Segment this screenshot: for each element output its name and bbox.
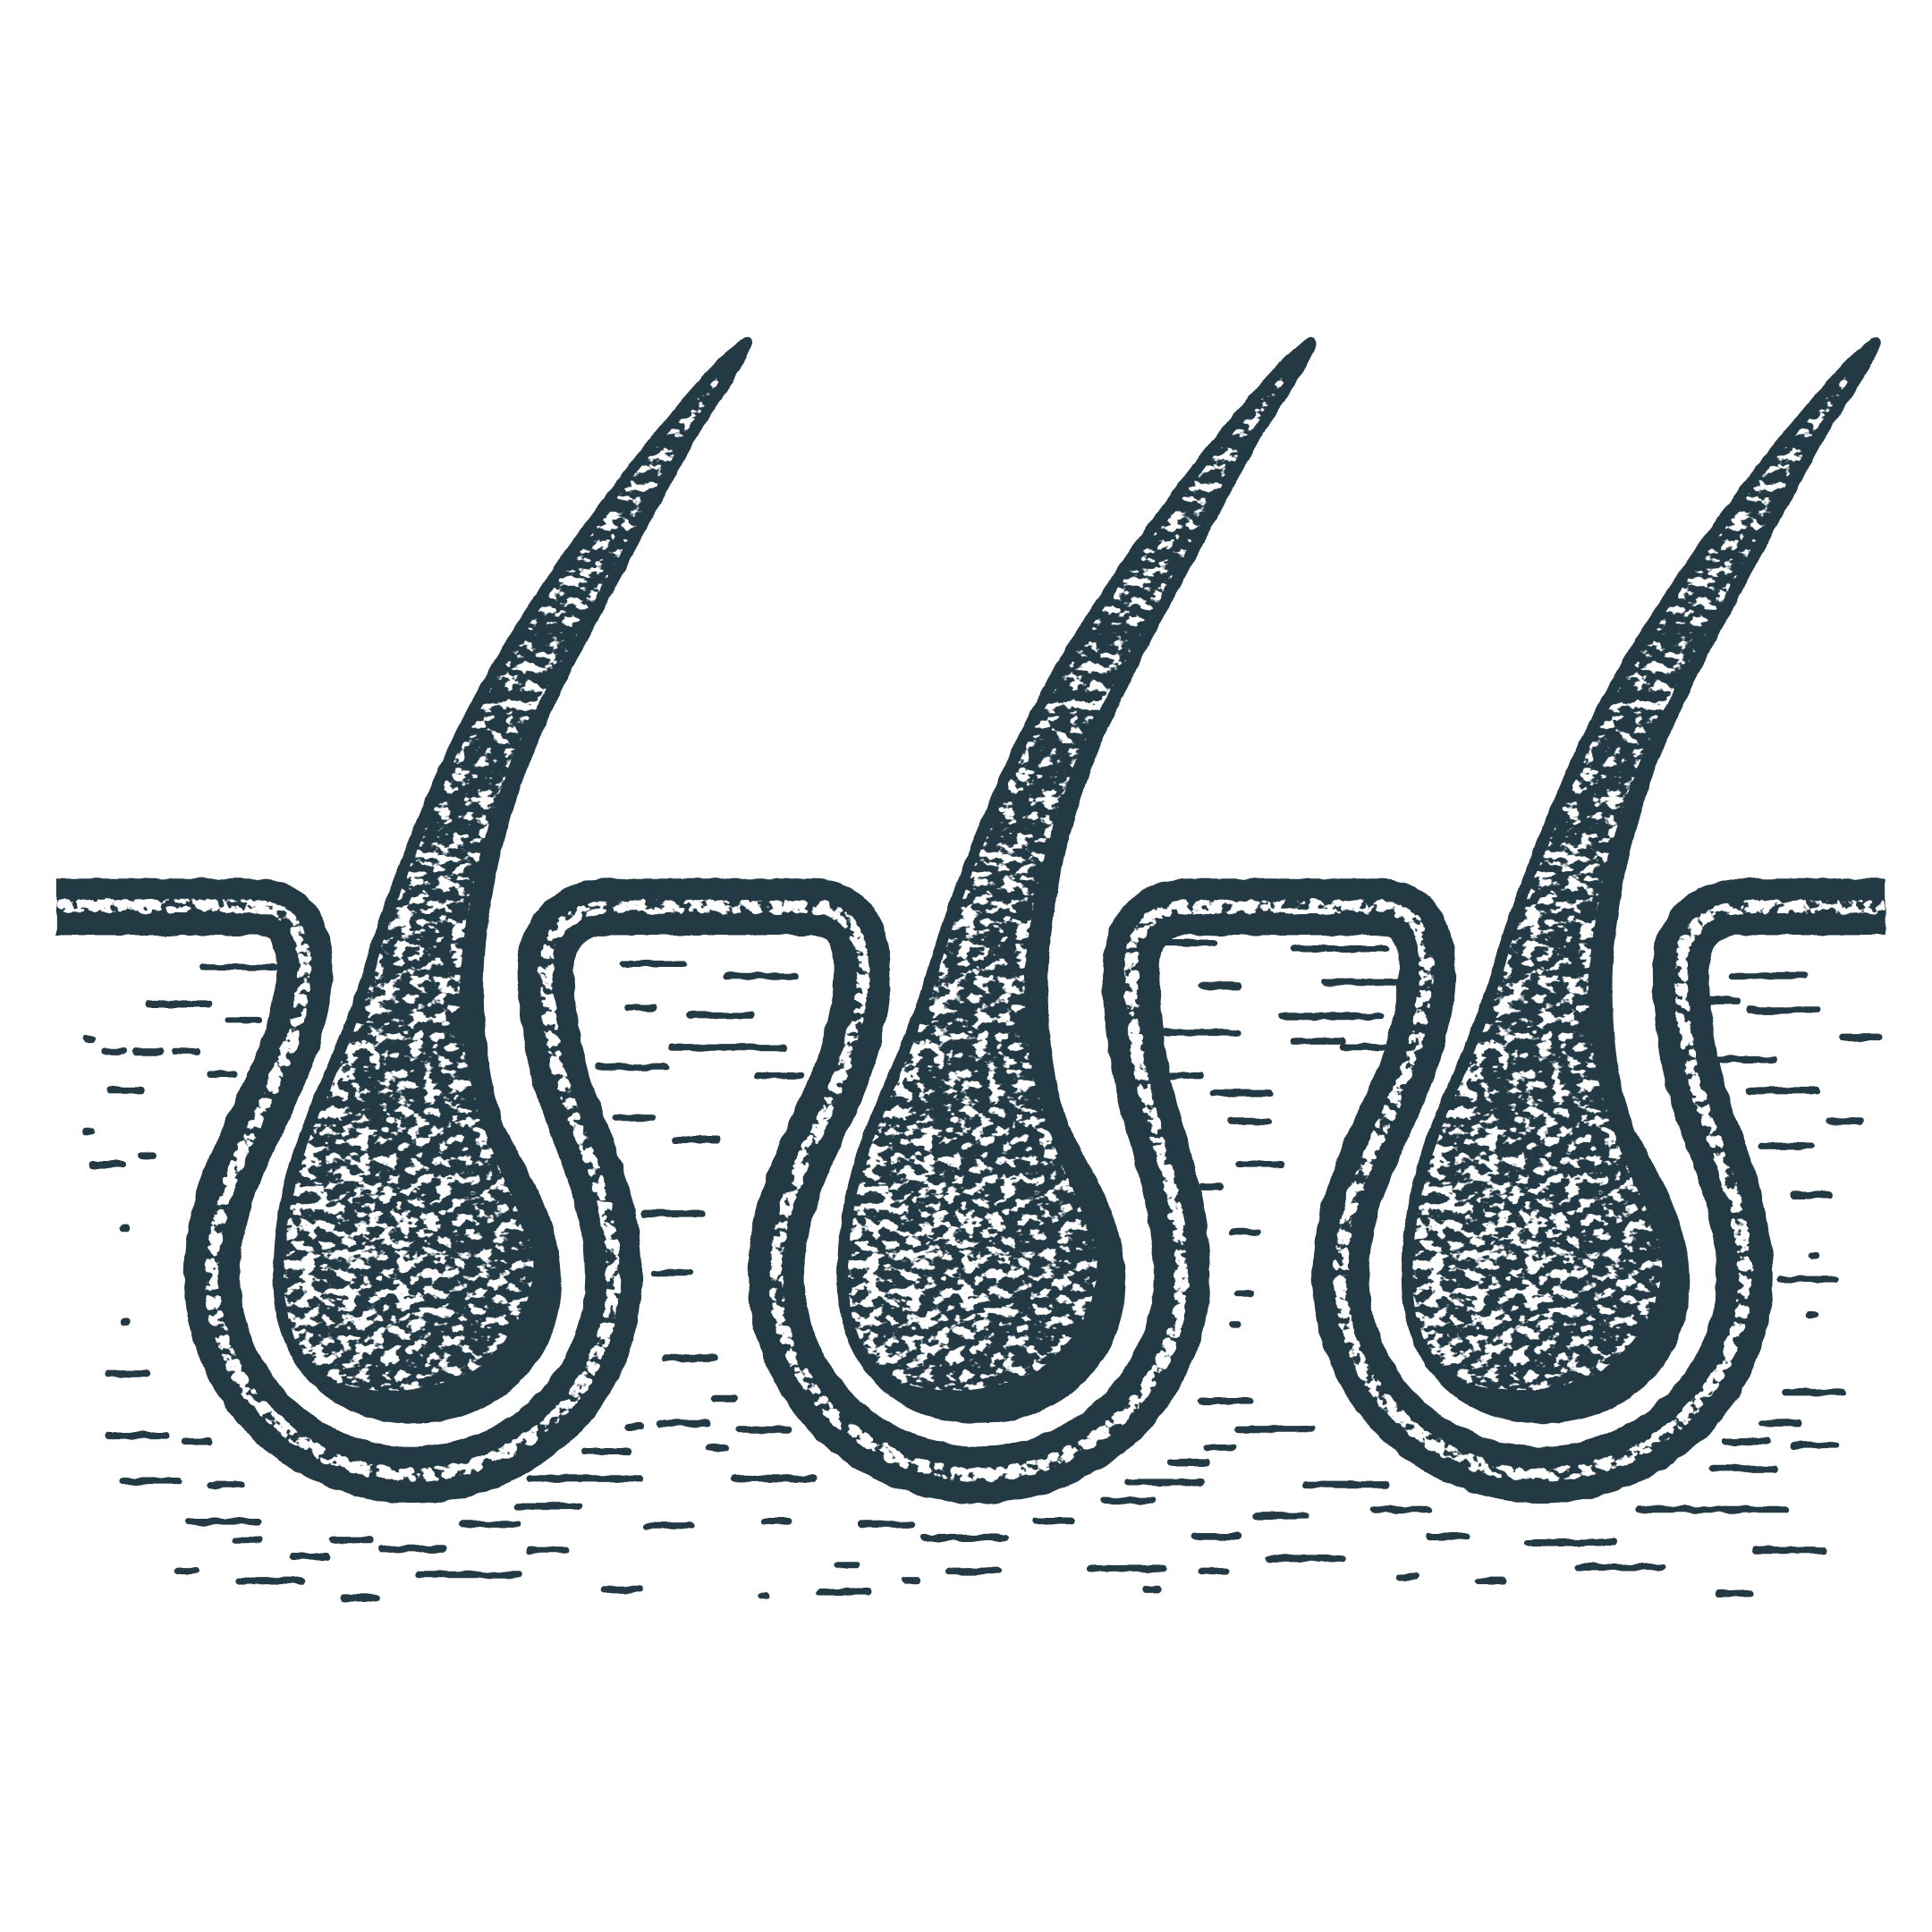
skin surface band around follicles [56,905,1885,1475]
hair strand and bulb: right [1397,343,1876,1419]
hair strand and bulb: middle [833,343,1311,1419]
hair strand and bulb: left [268,343,747,1419]
dermis texture dashes [86,943,1879,1598]
